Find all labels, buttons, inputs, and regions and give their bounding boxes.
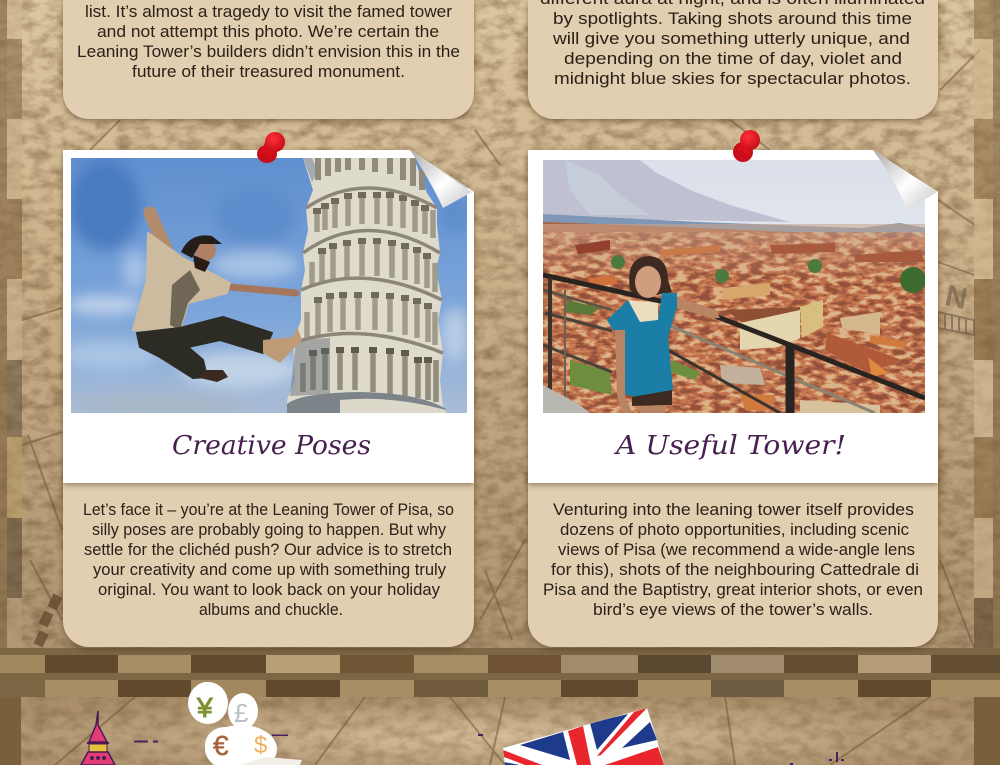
panel: A Useful Tower [528,130,938,647]
top right text panel: midnight blue skies for spectacular photos. [554,69,911,88]
text panel: a useful tower [528,470,938,647]
icon: British flag [503,708,664,765]
arches: tower galleries [303,158,436,402]
tower [287,158,446,413]
icon: red pin [257,132,285,163]
top left text panel: future of their treasured monument. [132,62,405,81]
top left text panel: and not attempt this photo. We’re certain the [97,22,439,41]
map lettering: N and ruler [938,262,974,335]
icon: pink tower [81,711,115,765]
text panel: creative poses: Let’s face it – you’re at the Leaning Tower of Pisa, so [83,500,454,519]
girl [607,256,720,413]
photo: man climbing tower [60,158,469,415]
top right text panel: by spotlights. Taking shots around this time [553,9,912,28]
text panel: a useful tower: for this), shots of the neighbouring Cattedrale di [551,560,919,579]
icon: red pin [733,130,760,162]
top left text panel [63,0,474,119]
bottom checker band [0,648,1000,698]
photo caption: A Useful Tower: A Useful Tower! [614,431,846,461]
panel: Creative Poses [60,132,474,647]
text panel: creative poses: albums and chuckle. [199,600,343,619]
page curl [410,150,472,208]
icon: money bubbles: ¥ [196,692,213,723]
city [543,222,926,413]
icon: money bubbles: $ [254,732,267,759]
text panel: a useful tower: Venturing into the leaning tower itself provides [553,500,914,519]
page curl [873,150,937,210]
text panel: a useful tower: bird’s eye views of the tower’s walls. [593,600,873,619]
top left text panel: list. It’s almost a tragedy to visit the famed tower [85,2,452,21]
icon: money bubbles [188,682,302,765]
top right text panel: will give you something utterly unique, and [552,29,910,48]
icon: purple marks [134,734,844,765]
polaroid frame [63,150,474,483]
photo caption: Creative Poses: Creative Poses [172,431,371,461]
text panel: creative poses: silly poses are probably going to happen. But why [92,520,446,539]
man [133,213,302,382]
top right text panel: depending on the time of day, violet and [564,49,902,68]
railing [543,275,925,413]
top right text panel [528,0,938,119]
photo: girl on tower balcony [543,160,926,413]
top left text panel: Leaning Tower’s builders didn’t envision this in the [77,42,460,61]
text panel: a useful tower: dozens of photo opportunities, including scenic [560,520,909,539]
text panel: a useful tower: Pisa and the Baptistry, great interior shots, or even [543,580,923,599]
icon: money bubbles: € [213,730,229,761]
polaroid frame [528,150,938,483]
text panel: creative poses [63,470,474,647]
text panel: creative poses: your creativity and come up with something truly [93,560,446,579]
map lettering: N and ruler: N [942,279,970,316]
text panel: creative poses: settle for the clichéd push? Our advice is to stretch [84,540,452,559]
lower panel background [0,697,1000,765]
icon: money bubbles: £ [234,698,249,728]
text panel: creative poses: original. You want to look back on your holiday [98,580,440,599]
text panel: a useful tower: views of Pisa (we recommend a wide-angle lens [558,540,915,559]
